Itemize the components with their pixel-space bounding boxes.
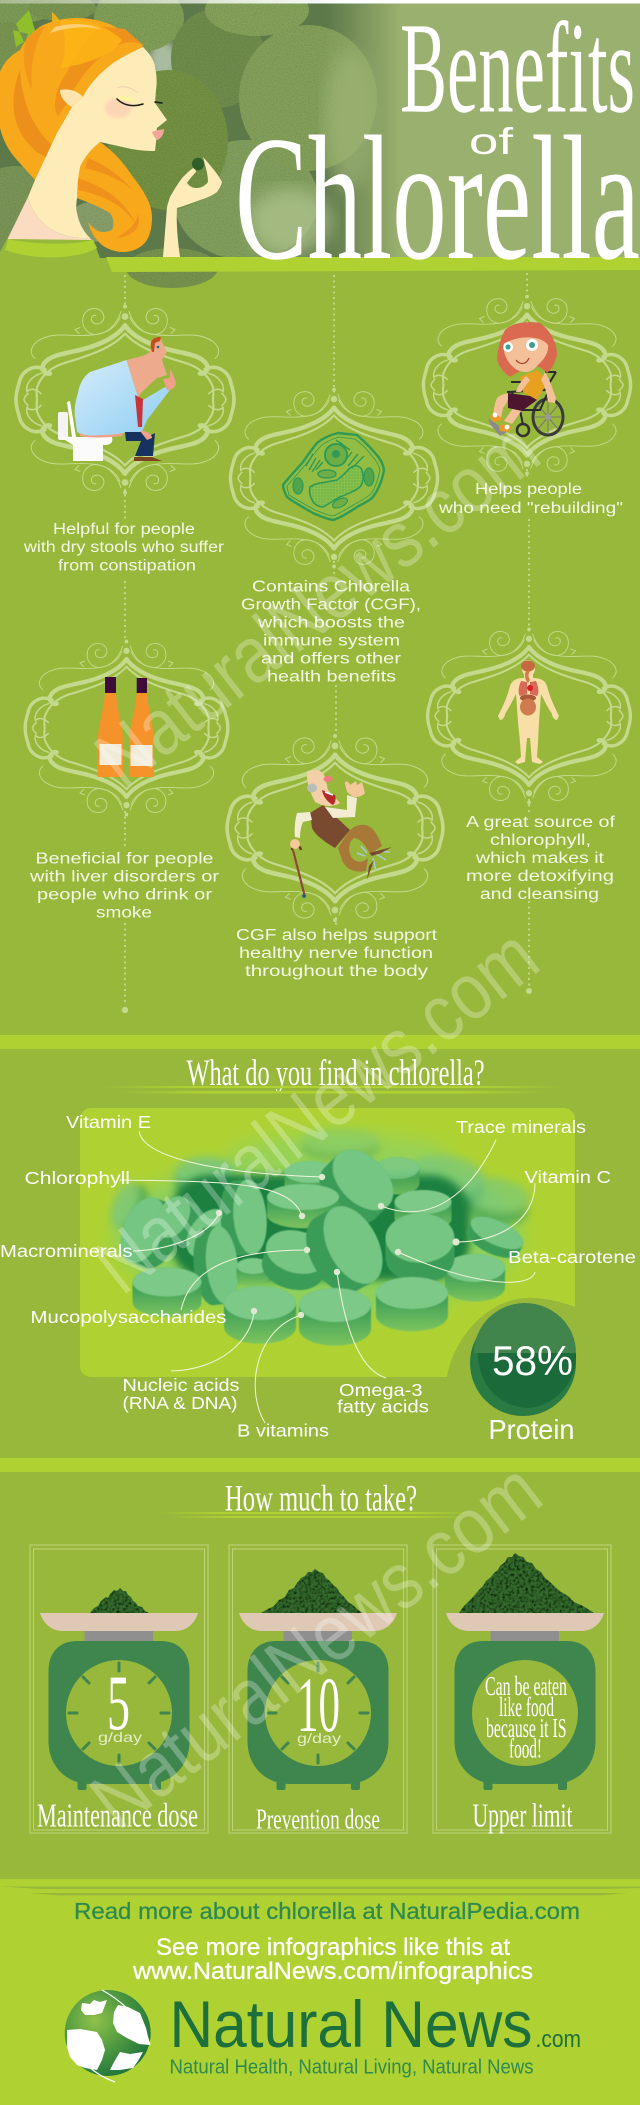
- panel: prevention dose: [229, 1545, 407, 1836]
- text: liver: people who drink or: [37, 886, 212, 904]
- cane: [293, 850, 305, 897]
- nutrient labels: fatty acids: [337, 1396, 429, 1416]
- powder pile: [261, 1569, 363, 1613]
- footer panel: [0, 1879, 640, 2105]
- dose label: Maintenance dose: [37, 1798, 198, 1834]
- dial text: food!: [509, 1734, 542, 1764]
- text: chlorophyll: which makes it: [475, 850, 605, 867]
- icon: girl in wheelchair: [488, 322, 563, 436]
- illustration: girl eating tablet: [0, 10, 222, 258]
- nutrient labels: Chlorophyll: [24, 1168, 130, 1188]
- dose number: g/day: [98, 1729, 142, 1745]
- organelles: [318, 470, 336, 478]
- shorts: [508, 393, 537, 411]
- icon: wine bottles: [98, 677, 154, 777]
- dotted connector lines: [125, 274, 529, 1006]
- title: [235, 0, 640, 297]
- text: CGF: immune system: [263, 632, 400, 650]
- legs: [493, 394, 522, 424]
- inner membrane: [287, 437, 380, 516]
- logo: wordmark: Natural Health, Natural Living, Natural News: [170, 2056, 534, 2078]
- dose number: [297, 1661, 341, 1748]
- arms: [295, 812, 312, 838]
- text: constipation: Helpful for people: [53, 521, 195, 538]
- text: rebuilding: Helps people: [475, 481, 582, 498]
- nutrient labels: Vitamin C: [524, 1167, 611, 1187]
- face: [504, 337, 548, 372]
- ornament frame: body: [428, 628, 630, 804]
- blush: [105, 98, 131, 118]
- text: CGF: health benefits: [267, 668, 396, 686]
- eyes: [503, 342, 513, 352]
- text: chlorophyll: more detoxifying: [466, 868, 614, 885]
- lime band: section 2: [0, 1035, 640, 1049]
- panel: lime backdrop: [80, 1108, 575, 1377]
- watermark: middle: NaturalNews.com: [78, 911, 554, 1310]
- protein badge: Protein: [488, 1414, 574, 1445]
- text: constipation: from constipation: [58, 558, 196, 574]
- dial ticks: [268, 1663, 368, 1763]
- text: nerve function: [236, 927, 438, 980]
- dose label: Upper limit: [472, 1798, 573, 1834]
- collar: [5, 239, 97, 257]
- icon: plant cell: [283, 433, 384, 520]
- dress: [0, 239, 100, 258]
- shirt: [520, 370, 547, 400]
- shoes: [367, 847, 392, 880]
- link: more infographics: [132, 1934, 533, 1985]
- text: nerve function: CGF also helps support: [236, 927, 438, 944]
- text: chlorophyll: and cleansing: [480, 886, 599, 903]
- text: chlorophyll: [466, 814, 616, 903]
- ornament frame: bottles: [25, 640, 228, 816]
- hair stripes: [55, 26, 143, 116]
- logo: wordmark: .com: [536, 2026, 581, 2053]
- text: liver: smoke: [96, 904, 152, 922]
- text: liver: Beneficial for people: [36, 850, 214, 868]
- photo: green tablets: [106, 1128, 532, 1346]
- nutrient labels: [0, 1112, 636, 1440]
- pants: [338, 825, 382, 872]
- ornament frame: wheelchair: [423, 295, 631, 475]
- hands: [345, 781, 365, 797]
- nutrient labels: Trace minerals: [456, 1117, 586, 1137]
- link: more infographics: See more infographics like this at: [156, 1934, 510, 1961]
- heading: how much to take: How much to take?: [225, 1478, 417, 1520]
- frame: [507, 372, 556, 425]
- nutrient labels: Omega-3: [339, 1380, 422, 1400]
- icon: man on toilet: [58, 337, 176, 461]
- powder pile: [90, 1588, 149, 1613]
- text: rebuilding: who need "rebuilding": [438, 500, 623, 517]
- logo: leaf globe: [65, 1990, 151, 2082]
- leader dots: [216, 1174, 460, 1318]
- blue shock marks: [357, 846, 390, 871]
- icon: human body with organs: [498, 660, 559, 764]
- dose number: g/day: [297, 1730, 341, 1746]
- panel: maintenance dose: [30, 1545, 208, 1834]
- text: CGF: [241, 578, 421, 686]
- ornament frame: constipation: [16, 304, 234, 494]
- wheels: [533, 399, 563, 435]
- notch behind protein badge: [447, 1298, 576, 1378]
- text: CGF: which boosts the: [257, 614, 405, 632]
- dose label: Prevention dose: [256, 1804, 380, 1836]
- watermark: upper: NaturalNews.com: [79, 404, 555, 803]
- nutrient labels: Mucopolysaccharides: [30, 1307, 227, 1327]
- scale: [40, 1613, 198, 1790]
- lime band: section 3: [0, 1458, 640, 1472]
- text: CGF: Growth Factor (CGF),: [241, 596, 421, 614]
- panel: upper limit: [433, 1545, 611, 1834]
- text: CGF: and offers other: [261, 650, 401, 668]
- link: more infographics: www.NaturalNews.com/infographics: [132, 1958, 533, 1985]
- footplate and shoes: [488, 418, 507, 436]
- text: chlorophyll: A great source of: [466, 814, 616, 831]
- header photo: chlorella tablets: [0, 0, 640, 288]
- ear: [60, 89, 83, 107]
- text: liver: with liver disorders or: [29, 868, 219, 886]
- arms: [516, 372, 556, 403]
- text: constipation: [23, 521, 224, 574]
- dial text: because it IS: [486, 1713, 566, 1743]
- dial ticks: [69, 1663, 169, 1763]
- hand: [163, 157, 222, 257]
- dose number: 5: [107, 1659, 130, 1746]
- skin: [28, 47, 167, 238]
- protein badge: [470, 1303, 576, 1445]
- head: [307, 770, 340, 806]
- nutrient labels: Beta-carotene: [508, 1247, 636, 1267]
- protein badge: 58%: [492, 1337, 573, 1384]
- nutrient labels: Macrominerals: [0, 1241, 133, 1261]
- hair back: [0, 18, 152, 252]
- text: liver: [29, 850, 219, 922]
- dose number: 10: [297, 1661, 340, 1748]
- dial text: [485, 1671, 567, 1764]
- leader lines: [120, 1131, 535, 1423]
- text: nerve function: healthy nerve function: [239, 945, 433, 962]
- title: of: [469, 121, 514, 162]
- ornament frame: old man: [227, 734, 443, 922]
- neck shadow: [7, 197, 92, 240]
- lips: [152, 129, 164, 140]
- mouth: [516, 358, 529, 364]
- scale: [446, 1613, 604, 1790]
- nutrient labels: (RNA & DNA): [122, 1393, 238, 1413]
- link: NaturalPedia: Read more about chlorella at NaturalPedia.com: [74, 1898, 580, 1924]
- dial text: like food: [499, 1692, 554, 1722]
- nutrient labels: B vitamins: [237, 1420, 329, 1440]
- icon: happy old man with cane: [290, 770, 392, 898]
- nutrient labels: Nucleic acids: [122, 1375, 240, 1395]
- ribbon: [13, 10, 36, 47]
- nutrient labels: Vitamin E: [66, 1112, 151, 1132]
- cell wall: [283, 433, 384, 520]
- powder pile: [459, 1553, 594, 1613]
- dial text: Can be eaten: [485, 1671, 567, 1701]
- eye: [118, 96, 137, 102]
- lime band under header: [106, 257, 640, 272]
- hair: [497, 322, 557, 377]
- reticulum: [306, 440, 364, 472]
- tablet: [192, 158, 204, 170]
- logo: wordmark: Natural News: [170, 1987, 532, 2061]
- watermark: lower: NaturalNews.com: [74, 1445, 557, 1845]
- text: chlorophyll: chlorophyll,: [490, 832, 591, 849]
- heading: what do you find: What do you find in chlorella?: [186, 1053, 484, 1094]
- text: CGF: Contains Chlorella: [252, 578, 410, 596]
- ornament frame: cell: [230, 388, 438, 568]
- scale: [239, 1613, 397, 1790]
- nucleus: [325, 444, 347, 466]
- text: constipation: with dry stools who suffer: [23, 539, 224, 556]
- vest: [310, 805, 350, 848]
- text: nerve function: throughout the body: [245, 963, 428, 980]
- text: rebuilding: [438, 481, 623, 517]
- chloroplast: [310, 466, 363, 507]
